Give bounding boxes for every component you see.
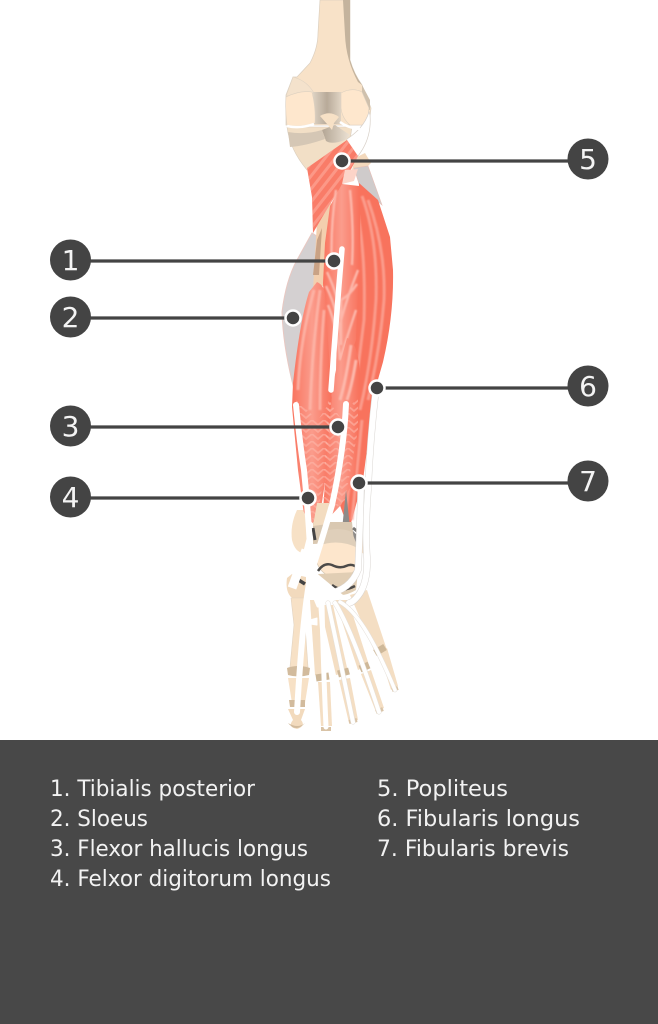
muscle: flexor hallucis longus: [322, 338, 360, 525]
tibialis tendon: [331, 249, 342, 390]
soleus grey cut section left: [282, 233, 323, 385]
white ligament: [346, 112, 370, 156]
legend column 2: 6. Fibularis longus: [377, 807, 580, 832]
legend column 1: 2. Sloeus: [50, 807, 148, 832]
fibula head: [352, 153, 371, 170]
intercondylar eminence: [320, 113, 339, 130]
soleus grey cut section right: [354, 166, 382, 205]
tendons: [292, 388, 395, 727]
fibularis brevis: [327, 484, 361, 594]
toe tendons: [322, 603, 326, 727]
muscle: fibularis right: [338, 183, 393, 530]
leg and foot anatomy illustration: [282, 0, 398, 729]
left malleolus: [292, 510, 310, 553]
tibia shaft strip: [313, 203, 331, 290]
callout 7: Fibularis brevis: 7: [579, 465, 597, 498]
callout 4: Flexor digitorum longus: 4: [62, 481, 79, 514]
callout 2: Soleus: [50, 296, 300, 338]
legend column 2: 7. Fibularis brevis: [377, 837, 569, 862]
callout 5: Popliteus: [334, 138, 608, 180]
tibia head: [287, 127, 352, 170]
tibial plateau band: [288, 130, 325, 147]
strap tendon: [292, 550, 306, 588]
legend column 2: [377, 777, 580, 862]
plantar fan: [313, 572, 342, 606]
callout 4: Flexor digitorum longus: [50, 476, 316, 518]
legend panel: [0, 740, 658, 1024]
callout 6: Fibularis longus: 6: [579, 370, 597, 403]
callout 2: Soleus: 2: [62, 301, 79, 334]
muscle: popliteus: [307, 140, 358, 233]
callout 1: Tibialis posterior: [50, 240, 342, 280]
legend column 1: 1. Tibialis posterior: [50, 777, 256, 802]
legend column 1: 4. Felxor digitorum longus: [50, 867, 331, 892]
knee joint notch: [313, 92, 341, 124]
muscle: tibialis posterior: [323, 184, 360, 398]
femur: [286, 0, 371, 125]
tendon: flexor digitorum longus: [296, 405, 310, 547]
legend column 2: 5. Popliteus: [377, 777, 508, 802]
right malleolus: [360, 535, 370, 555]
lateral condyle: [341, 90, 369, 125]
ankle grey bones: [313, 490, 362, 545]
popliteus tendon patch: [342, 169, 358, 184]
callout 1: Tibialis posterior: 1: [62, 244, 79, 277]
muscle: soleus lower left: [292, 282, 332, 528]
fibularis longus: [349, 388, 376, 603]
callout 6: Fibularis longus: [370, 366, 608, 406]
callout 5: Popliteus: 5: [579, 143, 597, 176]
flexor hallucis longus tendon: [297, 404, 346, 712]
legend column 1: 3. Flexor hallucis longus: [50, 837, 308, 862]
callout 3: Flexor hallucis longus: 3: [62, 410, 79, 443]
callout 3: Flexor hallucis longus: [50, 406, 346, 446]
callout 7: Fibularis brevis: [352, 460, 608, 502]
medial condyle: [286, 92, 315, 126]
legend column 1: [50, 777, 331, 892]
foot bones: [287, 528, 398, 729]
lower notch: [322, 125, 350, 143]
